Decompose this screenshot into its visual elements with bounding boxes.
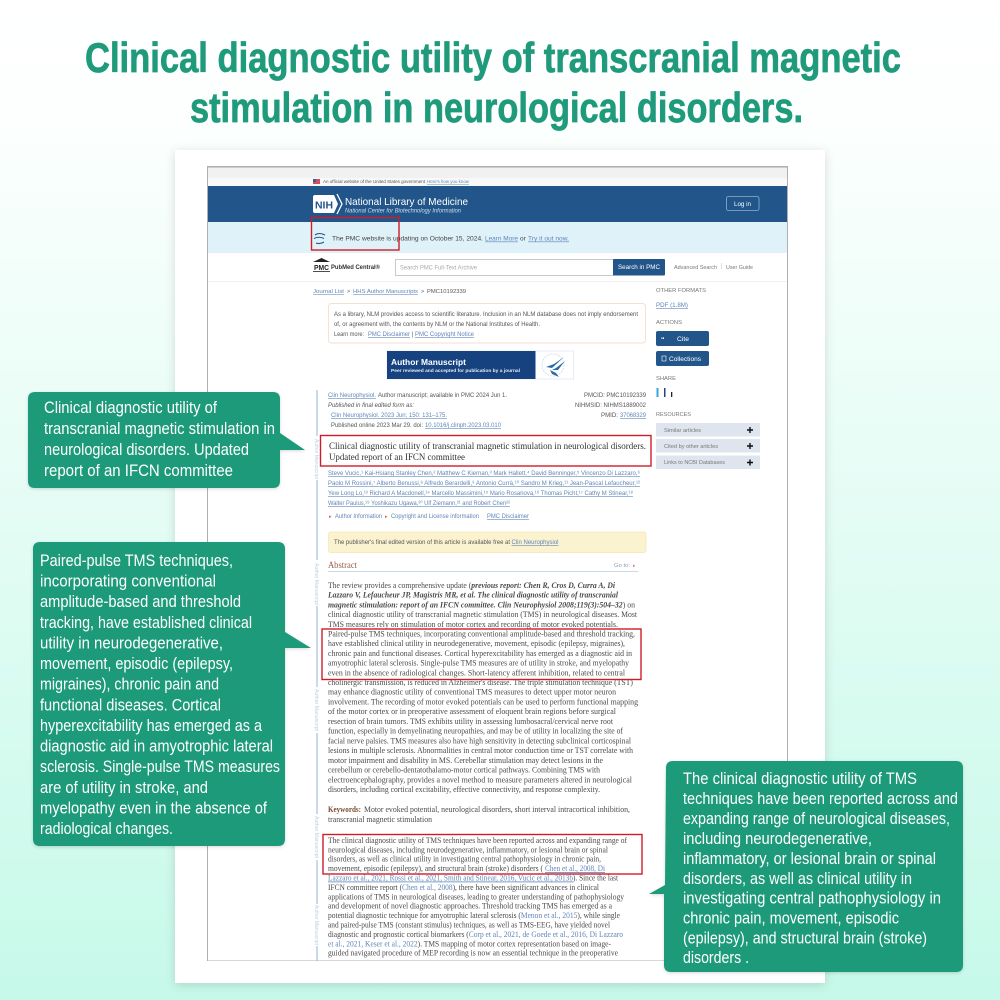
callout: clinical diagnostic utility: inflammatory, or lesional brain or spinal	[683, 850, 936, 868]
abstract text: cholinergic transmission, is reduced in Alzheimer's disease. The triple stimulation technique (TST)	[328, 678, 633, 687]
introduction text: potential diagnostic technique for amyotrophic lateral sclerosis (Menon et al., 2015), while single	[328, 911, 620, 920]
abstract text: involvement. The recording of motor evoked potentials can be used to perform functional mapping	[328, 698, 638, 706]
cite button	[656, 331, 709, 346]
abstract text: Lazzaro V, Lefaucheur JP, Magistris MR, et al. The clinical diagnostic utility of transcranial	[327, 591, 619, 600]
abstract text: have established clinical utility in neurodegenerative, movement, episodic (epilepsy, migraines),	[328, 639, 625, 648]
introduction text: neurological diseases, including neurodegenerative, inflammatory, or lesional brain or spinal	[328, 845, 609, 854]
callout: paired-pulse techniques: radiological changes.	[40, 820, 173, 838]
search row: Advanced Search	[674, 265, 717, 271]
notice bar: Try it out now.	[528, 236, 569, 242]
callout: paired-pulse techniques: migraines), chronic pain and	[40, 676, 219, 694]
library disclaimer box: As a library, NLM provides access to scientific literature. Inclusion in an NLM database does not imply endorsement	[334, 312, 638, 318]
library disclaimer box: |	[412, 332, 414, 338]
abstract text: chronic pain and functional diseases. Cortical hyperexcitability has emerged as a diagnostic aid in	[328, 649, 632, 658]
left manuscript rail: Author Manuscript	[313, 563, 319, 606]
article info links: PMC Disclaimer	[487, 514, 529, 520]
introduction text	[328, 836, 627, 958]
red highlight: paired-pulse passage	[322, 629, 641, 680]
cite button: “	[661, 337, 664, 344]
breadcrumb: Journal List	[313, 289, 345, 295]
callout: paired-pulse techniques: movement, episodic (epilepsy,	[40, 655, 233, 673]
left manuscript rail: Author Manuscript	[313, 439, 319, 480]
authors: Walter Paulus,¹⁹ Yoshikazu Ugawa,²⁰ Ulf Ziemann,²¹ and Robert Chen²²	[328, 500, 510, 507]
callout: paired-pulse techniques: are of utility in stroke, and	[40, 779, 208, 797]
keywords: Motor evoked potential, neurological disorders, short interval intracortical inhibition,	[364, 805, 630, 814]
screenshot frame	[208, 166, 788, 961]
callout: article title: transcranial magnetic stimulation in	[44, 420, 275, 438]
icon: NIH logo: NIH	[315, 200, 333, 212]
breadcrumb: HHS Author Manuscripts	[353, 289, 418, 295]
icon: PMC logo: PMC	[314, 265, 329, 272]
left manuscript rail: Author Manuscript	[313, 905, 319, 946]
abstract text: may enhance diagnostic utility of conventional TMS measures to detect upper motor neuron	[328, 688, 616, 697]
header: National Library of Medicine: National Library of Medicine	[345, 196, 468, 208]
icon: NIH logo	[313, 194, 342, 214]
notice bar	[207, 222, 788, 253]
red highlight: update notice	[312, 218, 399, 250]
citation block: PMID:	[601, 413, 618, 419]
introduction text: et al., 2021, Keser et al., 2022). TMS mapping of motor cortex representation based on image-	[328, 939, 611, 948]
breadcrumb: PMC10192339	[427, 289, 466, 295]
icon: update waves	[314, 234, 325, 244]
citation block	[328, 393, 647, 429]
title: stimulation in neurological disorders.	[190, 84, 803, 131]
introduction text: IFCN committee report (Chen et al., 2008), there have been significant advances in clinical	[328, 883, 600, 892]
introduction text: and paired-pulse TMS (constant stimulus) techniques, as well as TMS-EEG, have yielded novel	[328, 920, 611, 930]
abstract text: facial nerve palsies. TMS measures also have high sensitivity in detecting subclinical corticospinal	[328, 736, 632, 746]
search row: Search PMC Full-Text Archive	[400, 266, 478, 272]
introduction text: Lazzaro et al., 2021, Rossi et al., 2021, Smith and Stinear, 2016, Vucic et al., 2013b	[328, 874, 573, 882]
breadcrumb	[313, 289, 466, 295]
left manuscript rail: Author Manuscript	[313, 689, 319, 732]
breadcrumb: >	[421, 289, 424, 295]
callout: article title	[28, 392, 305, 488]
callout: clinical diagnostic utility: chronic pain, movement, episodic	[683, 910, 899, 928]
callout: clinical diagnostic utility: expanding range of neurological diseases,	[683, 810, 950, 828]
sidebar: ACTIONS	[656, 320, 682, 326]
keywords: Keywords:	[328, 805, 361, 814]
notice bar: The PMC website is updating on October 15, 2024.	[332, 236, 483, 242]
citation block: 10.1016/j.clinph.2023.03.010	[425, 423, 502, 429]
article title	[329, 441, 646, 462]
notice bar: Learn More	[485, 236, 518, 242]
keywords: transcranial magnetic stimulation	[328, 815, 432, 824]
collections button: Collections	[669, 356, 702, 363]
introduction text: The clinical diagnostic utility of TMS techniques have been reported across and expanding range of	[328, 836, 627, 845]
abstract heading: Go to:	[614, 563, 630, 569]
resource rows: Cited by other articles	[664, 444, 718, 450]
callout: clinical diagnostic utility: The clinical diagnostic utility of TMS	[683, 770, 917, 788]
citation block: Clin Neurophysiol.	[328, 393, 376, 399]
citation block: Published in final edited form as:	[328, 403, 414, 409]
callout: clinical diagnostic utility: including neurodegenerative,	[683, 830, 872, 848]
government banner	[313, 179, 470, 184]
red highlight: article title	[320, 436, 651, 466]
log in button	[726, 196, 759, 210]
left manuscript rail: Author Manuscript	[313, 816, 319, 859]
callout: clinical diagnostic utility: (epilepsy), and structural brain (stroke)	[683, 930, 927, 948]
abstract text	[327, 581, 638, 794]
author manuscript banner	[387, 351, 574, 379]
callout: paired-pulse techniques: utility in neurodegenerative,	[40, 634, 223, 652]
author manuscript banner: Author Manuscript	[391, 357, 466, 367]
callout: paired-pulse techniques: Paired-pulse TMS techniques,	[40, 552, 233, 570]
share icons	[656, 388, 672, 397]
abstract text: electroencephalography, provides a novel method to measure parameters altered in neurological	[328, 776, 633, 784]
icon: HHS eagle	[542, 354, 565, 377]
abstract text: TMS measures rely on stimulation of motor cortex and recording of motor evoked potentials.	[328, 620, 618, 629]
cite button: Cite	[677, 336, 689, 343]
callout: clinical diagnostic utility: disorders, as well as clinical utility in	[683, 870, 912, 888]
citation block: Clin Neurophysiol. 2023 Jun; 150: 131–175.	[331, 413, 447, 419]
resource rows: Links to NCBI Databases	[664, 460, 725, 466]
abstract text: The review provides a comprehensive update (previous report: Chen R, Cros D, Curra A, Di	[328, 581, 616, 590]
abstract text: lesions in multiple sclerosis. Abnormalities in central motor conduction time or TST correlate with	[328, 746, 633, 755]
callout: paired-pulse techniques: sclerosis. Single-pulse TMS measures	[40, 758, 280, 776]
resource rows	[656, 423, 760, 469]
library disclaimer box: of, or agreement with, the contents by NLM or the National Institutes of Health.	[334, 322, 540, 328]
callout: paired-pulse techniques: hyperexcitability has emerged as a	[40, 717, 263, 735]
abstract text: cerebellum or cerebello-dentatothalamo-motor cortical pathways. Combining TMS with	[328, 766, 600, 775]
keywords	[328, 805, 630, 824]
callout: article title: neurological disorders. Updated	[44, 441, 249, 459]
panel: white card	[175, 150, 825, 983]
callout: clinical diagnostic utility: disorders .	[683, 949, 749, 967]
resource rows: Similar articles	[664, 428, 701, 434]
author manuscript banner: Peer reviewed and accepted for publication by a journal	[391, 368, 520, 373]
search row	[207, 258, 788, 282]
introduction text: diagnostic and prognostic cortical biomarkers (Corp et al., 2021, de Goede et al., 2016, Di Lazzaro	[328, 930, 623, 939]
introduction text: and development of novel diagnostic approaches. Threshold tracking TMS has emerged as a	[328, 902, 612, 911]
callout: article title: report of an IFCN committee	[44, 462, 233, 480]
abstract text: Paired-pulse TMS techniques, incorporating conventional amplitude-based and threshold tracking,	[328, 630, 635, 638]
introduction text: movement, episodic (epilepsy), and structural brain (stroke) disorders (	[328, 864, 543, 873]
authors: Steve Vucic,¹ Kai-Hsiang Stanley Chen,² Matthew C Kiernan,³ Mark Hallett,⁴ David Benninger,⁵ Vincenzo Di Lazzaro,⁶	[328, 470, 641, 477]
citation block: 37068329	[620, 413, 647, 419]
citation block: NIHMSID: NIHMS1889002	[575, 403, 647, 409]
library disclaimer box: Learn more:	[334, 332, 364, 338]
article title: Clinical diagnostic utility of transcranial magnetic stimulation in neurological disorders.	[329, 441, 646, 451]
article info links: Author Information	[335, 514, 382, 520]
sidebar: PDF (1.8M)	[656, 303, 688, 309]
introduction text: disorders, as well as clinical utility in investigating central pathophysiology in chronic pain,	[328, 855, 601, 864]
citation block: Published online 2023 Mar 29. doi:	[331, 423, 423, 429]
sidebar: SHARE	[656, 376, 676, 382]
log in button: Log in	[734, 201, 751, 208]
library disclaimer box	[328, 304, 646, 343]
abstract heading: ▸	[633, 563, 636, 568]
government banner: Here's how you know	[427, 179, 470, 184]
abstract text: amyotrophic lateral sclerosis. Single-pulse TMS measures are of utility in stroke, and myelopathy	[328, 659, 629, 668]
abstract text: motor impairment and disability in MS. Cerebellar stimulation may detect lesions in the	[328, 756, 603, 765]
sidebar: RESOURCES	[656, 412, 691, 418]
introduction text: guided navigated procedure of MEP recording is now an essential technique in the preoperative	[328, 949, 618, 958]
publisher notice: Clin Neurophysiol	[512, 540, 558, 546]
article title: Updated report of an IFCN committee	[329, 452, 465, 462]
government banner: An official website of the United States government	[323, 179, 426, 184]
callout: article title: Clinical diagnostic utility of	[44, 399, 217, 417]
header: National Library of Medicine: National Center for Biotechnology Information	[345, 208, 462, 214]
abstract heading: Abstract	[328, 560, 357, 570]
abstract text: clinical diagnostic utility of transcranial magnetic stimulation (TMS) in neurological diseases. Most	[328, 610, 638, 619]
callout: paired-pulse techniques: functional diseases. Cortical	[40, 696, 221, 714]
callout: paired-pulse techniques: myelopathy even in the absence of	[40, 799, 267, 817]
article info links: Copyright and License information	[391, 514, 479, 520]
callout: clinical diagnostic utility	[649, 761, 963, 972]
article info links	[329, 514, 529, 520]
sidebar: OTHER FORMATS	[656, 288, 706, 294]
left manuscript rail	[314, 390, 319, 960]
callout: paired-pulse techniques: incorporating conventional	[40, 573, 216, 591]
search row: User Guide	[726, 265, 753, 271]
abstract text: even in the absence of radiological changes. Short-latency afferent inhibition, related to central	[328, 668, 626, 677]
header: National Library of Medicine	[207, 186, 788, 222]
article info links: ▸	[385, 514, 388, 520]
introduction text: ). Since the last	[573, 874, 619, 882]
search row: PubMed Central®	[331, 263, 380, 271]
search row: Search in PMC	[618, 264, 660, 271]
panel: article screenshot	[207, 166, 788, 961]
abstract heading	[328, 562, 638, 572]
notice bar: or	[520, 236, 527, 242]
abstract text: magnetic stimulation: report of an IFCN committee. Clin Neurophysiol 2008;119(3):504–32) on	[328, 600, 635, 609]
callout: clinical diagnostic utility: techniques have been reported across and	[683, 790, 958, 808]
publisher notice: The publisher's final edited version of this article is available free at	[334, 540, 510, 546]
library disclaimer box: PMC Copyright Notice	[415, 332, 475, 338]
breadcrumb: >	[347, 289, 350, 295]
sidebar	[656, 288, 760, 469]
citation block: Author manuscript; available in PMC 2024 Jun 1.	[378, 393, 507, 399]
publisher notice	[328, 532, 646, 552]
callout: paired-pulse techniques	[33, 542, 311, 846]
abstract text: disorders, including cortical excitability, effective connectivity, and response complexity.	[328, 785, 600, 794]
library disclaimer box: PMC Disclaimer	[368, 332, 410, 338]
callout: paired-pulse techniques: amplitude-based and threshold	[40, 593, 241, 611]
citation block: PMCID: PMC10192339	[584, 393, 647, 399]
introduction text: applications of TMS in neurological diseases, leading to greater understanding of pathophysiology	[328, 892, 624, 901]
authors: Paolo M Rossini,⁷ Alberto Benussi,⁸ Alfredo Berardelli,⁹ Antonio Currà,¹⁰ Sandro M Krieg,¹¹ Jean-Pascal Lefaucheur,¹²	[328, 480, 640, 487]
title	[85, 34, 901, 131]
authors: Yew Long Lo,¹³ Richard A Macdonell,¹⁴ Marcello Massimini,¹⁵ Mario Rosanova,¹⁶ Thomas Picht,¹⁷ Cathy M Stinear,¹⁸	[328, 490, 633, 497]
red highlight: clinical utility passage	[323, 834, 642, 874]
abstract text: function, especially in demyelinating neuropathies, and may be of utility in localizing the site of	[328, 727, 623, 736]
collections button	[656, 351, 709, 366]
authors	[328, 470, 641, 507]
callout: clinical diagnostic utility: investigating central pathophysiology in	[683, 890, 941, 908]
icon: PMC logo	[313, 258, 330, 272]
abstract text: resection of brain tumors. TMS exhibits utility in assessing lumbosacral/cervical nerve root	[328, 717, 614, 726]
introduction text: Chen et al., 2008, Di	[545, 864, 606, 873]
abstract text: of the motor cortex or in preoperative assessment of eloquent brain regions before surgical	[328, 707, 617, 716]
article info links: ▸	[329, 514, 332, 520]
callout: paired-pulse techniques: tracking, have established clinical	[40, 614, 252, 632]
callout: paired-pulse techniques: diagnostic aid in amyotrophic lateral	[40, 738, 273, 756]
